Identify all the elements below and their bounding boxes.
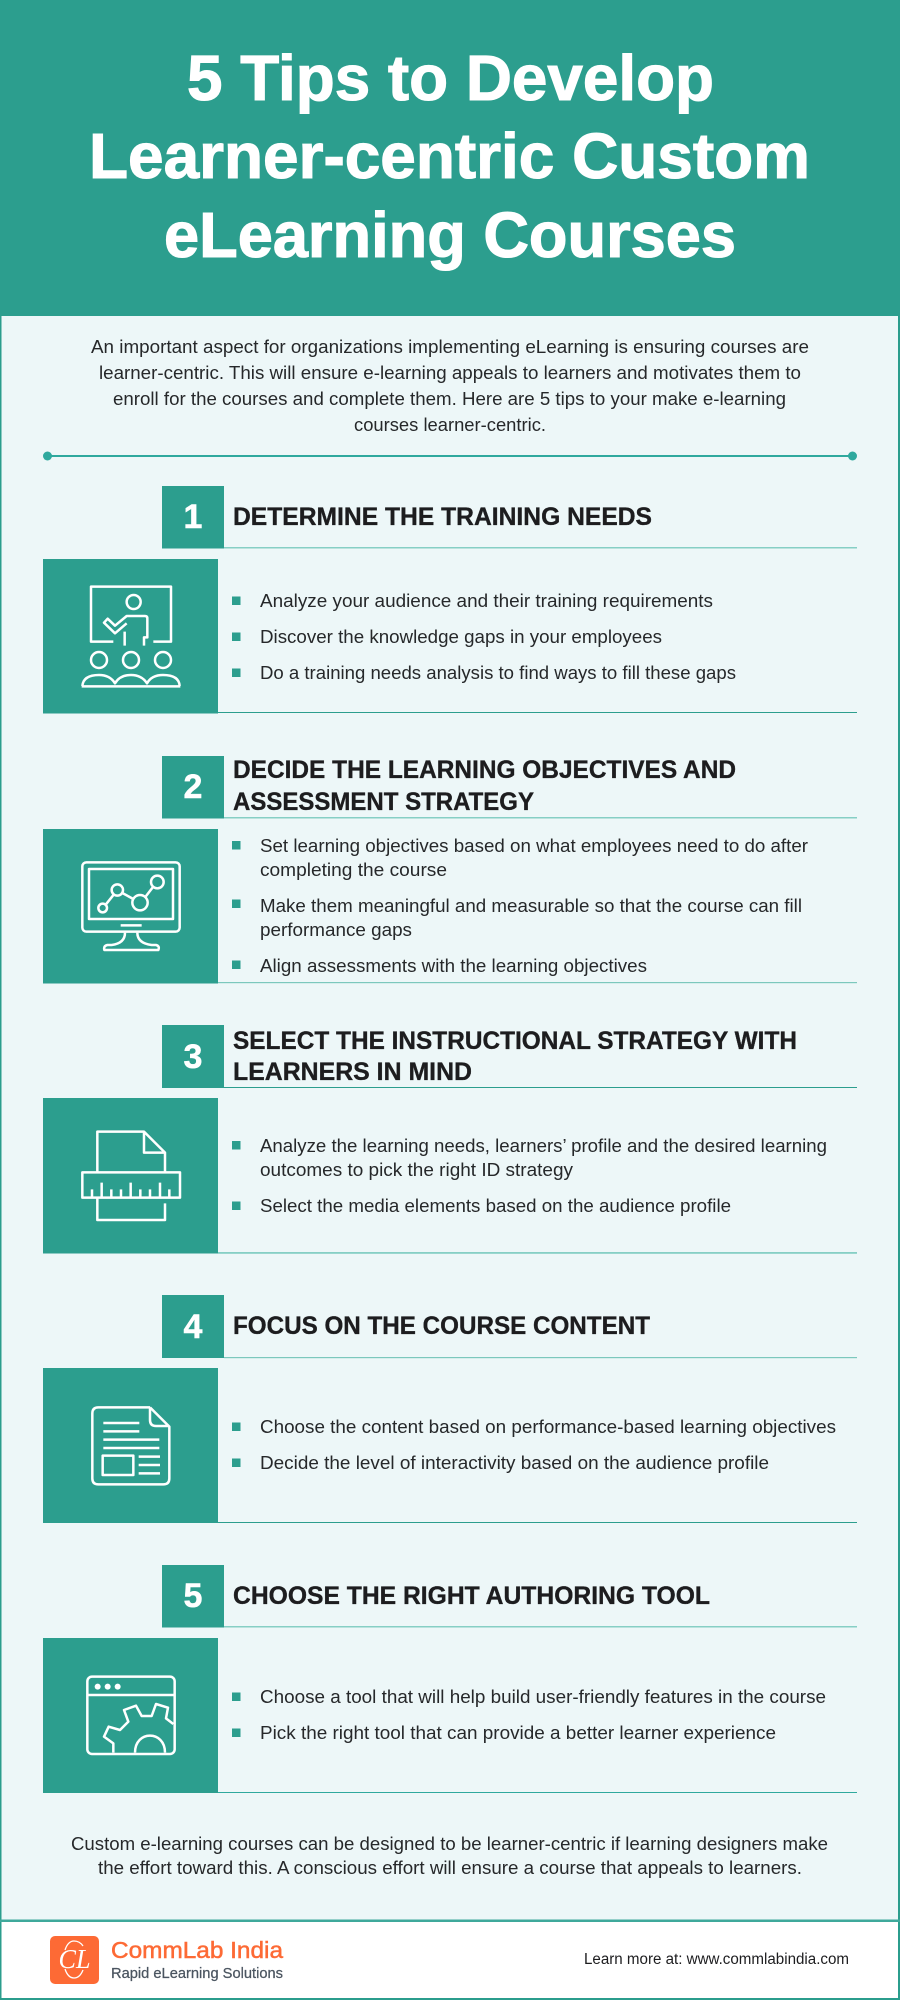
section 5 bullets: Choose a tool that will help build user-friendly features in the course [260, 1686, 826, 1707]
closing paragraph [71, 1833, 828, 1878]
section 1 header: DETERMINE THE TRAINING NEEDS [233, 503, 652, 531]
section 2 bullets: Make them meaningful and measurable so that the course can fill [260, 895, 802, 916]
logo wordmark [111, 1937, 283, 1982]
section 2 bullets: Align assessments with the learning objectives [260, 955, 647, 976]
logo mark: CL [58, 1944, 90, 1974]
section 4 bullets [232, 1416, 836, 1473]
section 3 bullets [232, 1135, 827, 1216]
intro paragraph [91, 336, 809, 435]
section 1 bullets: Do a training needs analysis to find ways to fill these gaps [260, 662, 736, 683]
closing paragraph: Custom e-learning courses can be designed to be learner-centric if learning designers make [71, 1833, 828, 1854]
section 4 bullets: Choose the content based on performance-based learning objectives [260, 1416, 836, 1437]
section 2 header: DECIDE THE LEARNING OBJECTIVES AND [233, 756, 736, 784]
section 2 header [162, 756, 857, 818]
logo wordmark: CommLab India [111, 1937, 283, 1963]
section 3 header [162, 1025, 857, 1088]
section 1 bullets: Discover the knowledge gaps in your employees [260, 626, 662, 647]
section 1 bullets: Analyze your audience and their training requirements [260, 590, 713, 611]
section 5 bullets: Pick the right tool that can provide a better learner experience [260, 1722, 776, 1743]
section 4 header [162, 1295, 857, 1358]
section 4 icon panel: document [43, 1368, 857, 1523]
section 5 header: 5 [184, 1577, 202, 1615]
intro paragraph: An important aspect for organizations implementing eLearning is ensuring courses are [91, 336, 809, 357]
closing paragraph: the effort toward this. A conscious effort will ensure a course that appeals to learners. [98, 1857, 802, 1878]
title: 5 Tips to Develop [187, 42, 714, 114]
section 2 icon panel: monitor with line chart [43, 829, 857, 984]
section 5 header [162, 1565, 857, 1628]
title banner [0, 0, 900, 316]
intro paragraph: learner-centric. This will ensure e-learning appeals to learners and motivates them to [99, 362, 801, 383]
footer [0, 1920, 900, 2000]
section 1 header: 1 [184, 498, 202, 536]
section 3 header: SELECT THE INSTRUCTIONAL STRATEGY WITH [233, 1027, 797, 1055]
section 2 bullets: completing the course [260, 859, 447, 880]
section 4 header: 4 [184, 1308, 203, 1346]
title [89, 42, 810, 271]
section 3 bullets: Analyze the learning needs, learners’ profile and the desired learning [260, 1135, 827, 1156]
intro divider with end dots [43, 452, 857, 460]
section 1 icon panel: teacher and audience [43, 559, 857, 714]
title: eLearning Courses [164, 199, 736, 271]
section 3 header: LEARNERS IN MIND [233, 1058, 472, 1086]
section 3: instructional strategy [43, 1025, 857, 1254]
section 5 bullets [232, 1686, 826, 1743]
section 2 header: ASSESSMENT STRATEGY [233, 788, 534, 816]
section 5 icon panel: browser window with gear [43, 1638, 857, 1793]
title: Learner-centric Custom [89, 120, 810, 192]
section 1 bullets [232, 590, 736, 683]
section 4 bullets: Decide the level of interactivity based on the audience profile [260, 1452, 769, 1473]
section 4: course content [43, 1295, 857, 1523]
section 2 bullets [232, 835, 808, 976]
section 3 bullets: outcomes to pick the right ID strategy [260, 1159, 574, 1180]
intro paragraph: enroll for the courses and complete them. Here are 5 tips to your make e-learning [113, 388, 786, 409]
intro paragraph: courses learner-centric. [354, 414, 546, 435]
section 2 bullets: Set learning objectives based on what employees need to do after [260, 835, 808, 856]
section 1 header [162, 486, 857, 548]
section 3 header: 3 [184, 1038, 202, 1076]
logo wordmark: Rapid eLearning Solutions [111, 1966, 283, 1982]
section 4 header: FOCUS ON THE COURSE CONTENT [233, 1312, 650, 1340]
section 2: learning objectives and assessment strategy [43, 756, 857, 984]
section 3 icon panel: document through ruler [43, 1098, 857, 1254]
section 1: determine the training needs [43, 486, 857, 714]
section 2 header: 2 [184, 768, 202, 806]
section 2 bullets: performance gaps [260, 919, 412, 940]
logo mark [50, 1936, 99, 1984]
section 3 bullets: Select the media elements based on the audience profile [260, 1195, 731, 1216]
section 5: authoring tool [43, 1565, 857, 1793]
section 5 header: CHOOSE THE RIGHT AUTHORING TOOL [233, 1582, 710, 1610]
website link: Learn more at: www.commlabindia.com [584, 1951, 849, 1968]
